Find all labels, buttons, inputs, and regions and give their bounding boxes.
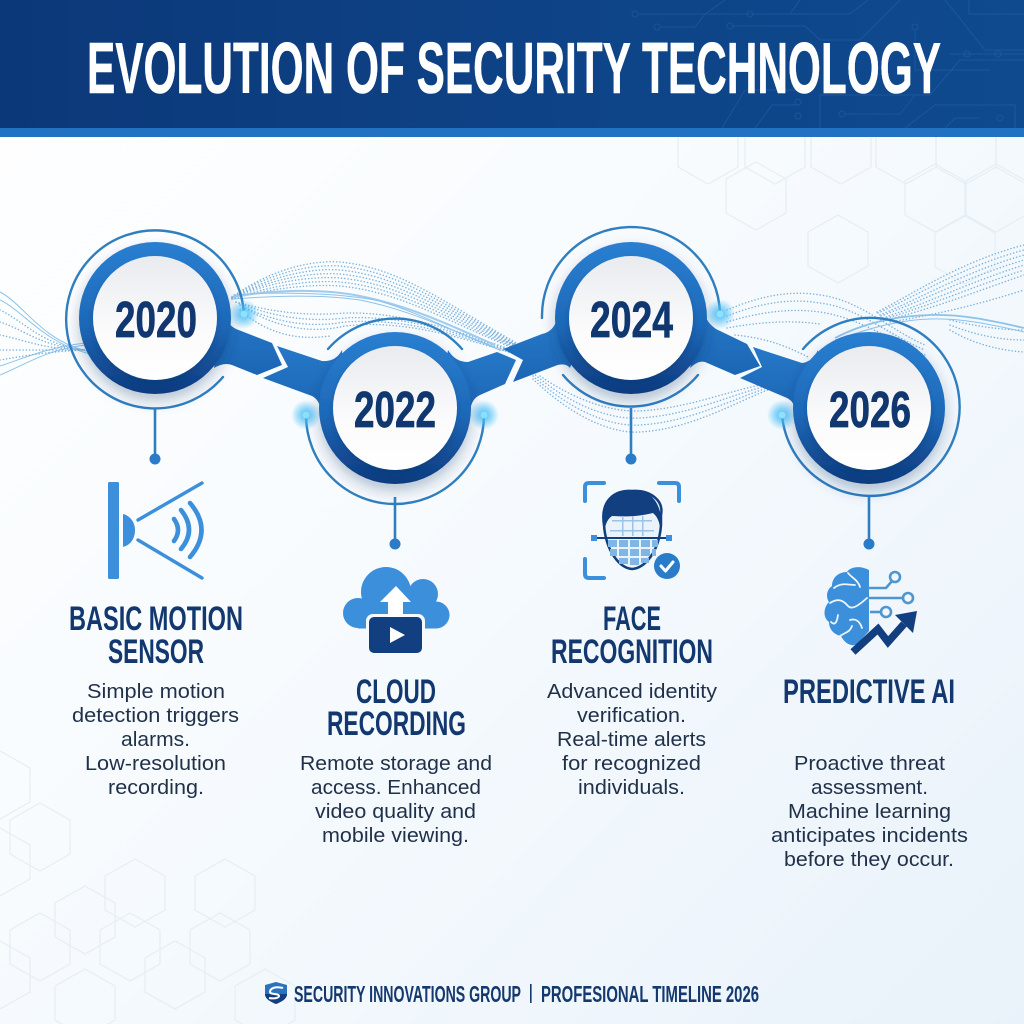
description: Remote storage and bbox=[300, 752, 492, 775]
glow dots bbox=[291, 400, 499, 430]
heading: BASIC MOTION bbox=[69, 600, 243, 638]
panel: predictive ai bbox=[771, 567, 968, 871]
description: Advanced identity bbox=[547, 680, 718, 703]
heading: RECORDING bbox=[327, 705, 466, 743]
glow dot bbox=[705, 299, 735, 329]
hexagon pattern: top right bbox=[678, 116, 1024, 284]
description bbox=[72, 680, 239, 799]
panel: cloud recording bbox=[300, 567, 492, 847]
heading bbox=[327, 673, 466, 743]
timeline node: 2020 bbox=[66, 230, 259, 464]
description: anticipates incidents bbox=[771, 824, 968, 847]
year: 2022 bbox=[354, 381, 436, 438]
description: Simple motion bbox=[87, 680, 225, 703]
panel: basic motion sensor bbox=[69, 482, 243, 799]
heading: RECOGNITION bbox=[551, 633, 713, 671]
description: Machine learning bbox=[788, 800, 951, 823]
hexagon pattern: bottom left bbox=[0, 751, 295, 1024]
heading bbox=[551, 600, 713, 671]
timeline node: 2022 bbox=[291, 319, 499, 550]
description: detection triggers bbox=[72, 704, 239, 727]
icon: brain circuit with rising arrow bbox=[824, 567, 917, 652]
heading: PREDICTIVE AI bbox=[783, 673, 955, 711]
icon: shield bbox=[265, 982, 287, 1004]
glow dot bbox=[767, 400, 797, 430]
description: mobile viewing. bbox=[322, 824, 469, 847]
timeline node: 2024 bbox=[542, 227, 735, 464]
footer subtitle: PROFESIONAL TIMELINE 2026 bbox=[541, 981, 759, 1007]
description: before they occur. bbox=[784, 848, 954, 871]
description bbox=[771, 752, 968, 871]
header banner bbox=[0, 0, 1024, 137]
footer text: SECURITY INNOVATIONS GROUP bbox=[294, 981, 521, 1007]
description: verification. bbox=[577, 704, 686, 727]
description: alarms. bbox=[121, 728, 190, 751]
description: assessment. bbox=[811, 776, 928, 799]
footer bbox=[265, 981, 759, 1007]
year: 2026 bbox=[829, 381, 911, 438]
glow dot bbox=[229, 299, 259, 329]
decorative data waves bbox=[0, 245, 1024, 432]
description bbox=[547, 680, 718, 799]
timeline node: 2026 bbox=[767, 318, 960, 550]
header accent stripe bbox=[0, 128, 1024, 137]
icon: cloud upload with video bbox=[343, 567, 450, 656]
description: Real-time alerts bbox=[557, 728, 706, 751]
icon: face scan bbox=[585, 483, 680, 579]
heading: FACE bbox=[603, 600, 661, 638]
description bbox=[300, 752, 492, 847]
description: Proactive threat bbox=[794, 752, 945, 775]
footer divider bbox=[530, 984, 532, 1003]
panel: face recognition bbox=[547, 483, 718, 799]
heading: CLOUD bbox=[356, 673, 436, 711]
year: 2024 bbox=[590, 291, 673, 348]
description: access. Enhanced bbox=[311, 776, 481, 799]
circuit board pattern bbox=[632, 0, 1024, 128]
description: recording. bbox=[108, 776, 204, 799]
description: Low-resolution bbox=[85, 752, 226, 775]
description: for recognized bbox=[562, 752, 701, 775]
icon: motion sensor bbox=[108, 482, 202, 579]
description: video quality and bbox=[315, 800, 476, 823]
timeline connector arrows bbox=[214, 312, 820, 412]
year: 2020 bbox=[115, 291, 197, 348]
heading: SENSOR bbox=[108, 633, 204, 671]
description: individuals. bbox=[578, 776, 685, 799]
heading bbox=[69, 600, 243, 671]
